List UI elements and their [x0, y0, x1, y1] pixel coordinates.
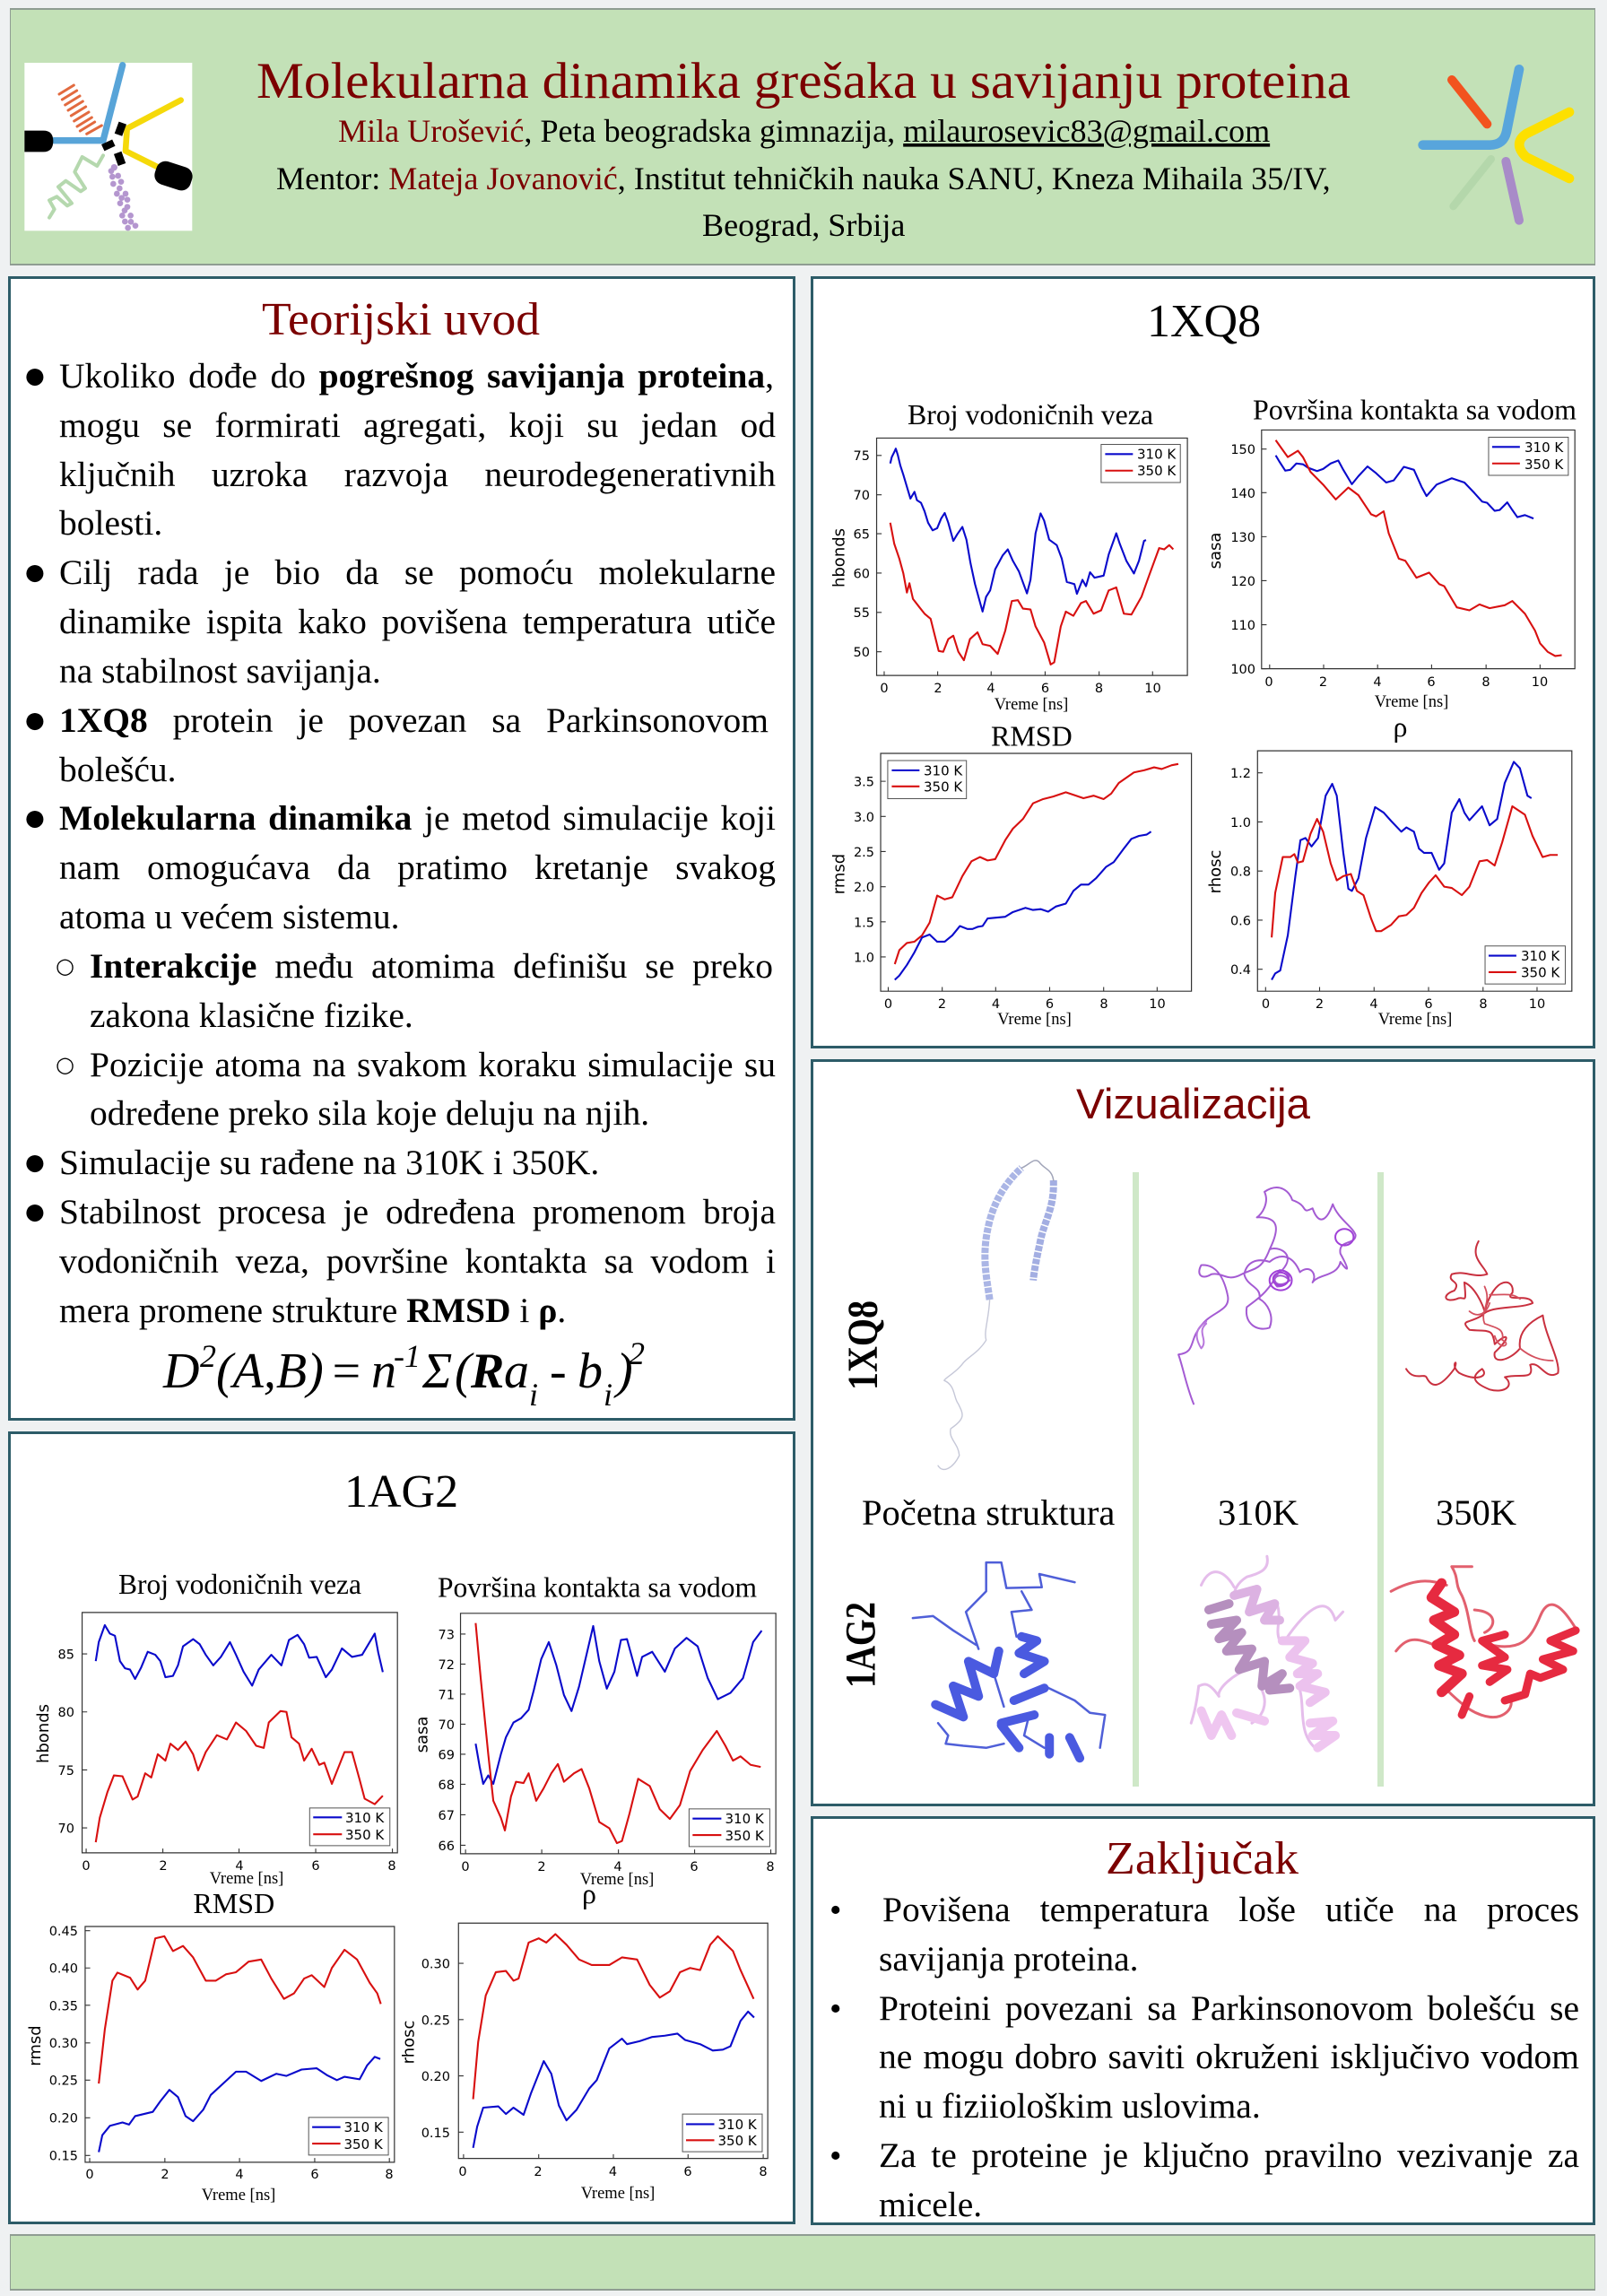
chart: 1XQ8 rmsd: 310 K: [924, 762, 963, 778]
chart: 1AG2 hbonds: Vreme [ns]: [210, 1870, 283, 1888]
panel: Teorijski uvod: ●: [25, 362, 45, 388]
chart: 1AG2 rmsd: 0: [85, 2168, 94, 2182]
protein: 1AG2 at 310K: [1191, 1556, 1343, 1750]
chart: 1AG2 rmsd: Vreme [ns]: [202, 2187, 275, 2205]
formula: 2: [629, 1335, 645, 1371]
text block: introduction bullets: Pozicije atoma na svakom koraku simulacije su: [90, 1045, 776, 1084]
chart: 1AG2 rhosc: 4: [609, 2165, 617, 2179]
heading: 1AG2: 1AG2: [344, 1466, 458, 1518]
chart: 1XQ8 sasa: 0: [1264, 675, 1273, 690]
chart: 1AG2 hbonds: 4: [235, 1859, 244, 1874]
chart: 1AG2 rmsd: 350 K: [344, 2136, 384, 2152]
chart: 1AG2 sasa: 69: [439, 1749, 455, 1763]
chart: 1AG2 hbonds: 70: [58, 1822, 74, 1837]
panel: Teorijski uvod: ●: [25, 1198, 45, 1224]
panel: Teorijski uvod: ●: [25, 804, 45, 831]
formula: -: [550, 1344, 567, 1399]
text block: introduction bullets: Interakcije među atomima definišu se preko: [90, 946, 773, 986]
location line: Beograd, Srbija: [702, 207, 905, 243]
chart: 1XQ8 rmsd: RMSD: [991, 719, 1073, 752]
formula: (A,B): [216, 1344, 324, 1399]
text block: conclusions: Proteini povezani sa Parkinsonovom bolešću se: [879, 1988, 1579, 2028]
chart: 1XQ8 rmsd: 2.5: [854, 846, 874, 860]
chart: 1XQ8 sasa: 8: [1481, 675, 1490, 690]
chart: 1XQ8 rmsd: Vreme [ns]: [997, 1011, 1072, 1029]
chart: 1AG2 rmsd: 0.30: [49, 2037, 78, 2051]
text block: introduction bullets: bolešću.: [59, 750, 177, 789]
formula: R: [470, 1344, 504, 1399]
text block: introduction bullets: atoma u većem sistemu.: [59, 897, 400, 936]
chart: 1AG2 sasa: Vreme [ns]: [580, 1871, 654, 1889]
chart: 1AG2 hbonds: 85: [58, 1648, 74, 1663]
chart: 1XQ8 sasa: Vreme [ns]: [1375, 693, 1448, 711]
protein: 1XQ8 at 350K: [1406, 1241, 1559, 1391]
chart: 1XQ8 hbonds: 10: [1144, 682, 1161, 696]
chart: 1XQ8 rmsd: 8: [1099, 997, 1108, 1012]
panel: 1AG2 charts: [8, 1431, 795, 2224]
chart: 1AG2 rmsd: RMSD: [194, 1887, 274, 1919]
chart: 1XQ8 hbonds: 8: [1095, 682, 1103, 696]
chart: 1AG2 hbonds: Broj vodoničnih veza: [118, 1568, 361, 1600]
chart: 1XQ8 rmsd: 0: [884, 997, 892, 1012]
panel: Zaključak: •: [830, 1990, 841, 2028]
mentor line: Mentor: Mateja Jovanović, Institut tehničkih nauka SANU, Kneza Mihaila 35/IV,: [276, 161, 1331, 196]
title: Molekularna dinamika grešaka u savijanju proteina: [256, 53, 1351, 109]
formula: Σ: [421, 1344, 452, 1399]
formula: ): [613, 1344, 633, 1399]
chart: 1XQ8 rhosc: 4: [1369, 997, 1378, 1012]
chart: 1AG2 rmsd: rmsd: [26, 2025, 45, 2066]
text block: introduction bullets: 1XQ8 protein je povezan sa Parkinsonovom: [59, 700, 769, 740]
chart: 1XQ8 rhosc: 1.0: [1230, 816, 1251, 831]
chart: 1XQ8 hbonds: hbonds: [830, 528, 848, 587]
chart: 1XQ8 sasa: 10: [1532, 675, 1548, 690]
text block: introduction bullets: ključnih uzroka razvoja neurodegenerativnih: [59, 455, 776, 494]
text block: introduction bullets: vodoničnih veza, površine kontakta sa vodom i: [59, 1241, 776, 1281]
chart: 1XQ8 hbonds: 4: [986, 682, 995, 696]
formula: (: [455, 1344, 474, 1399]
chart: 1AG2 rmsd: 0.45: [49, 1925, 78, 1939]
chart: 1XQ8 sasa: 130: [1230, 531, 1255, 545]
chart: 1XQ8 rmsd: 2.0: [854, 881, 874, 895]
chart: 1XQ8 hbonds: Vreme [ns]: [995, 696, 1068, 714]
text block: introduction bullets: dinamike ispita kako povišena temperatura utiče: [59, 602, 776, 641]
chart: 1XQ8 rhosc: 0.4: [1230, 963, 1251, 978]
formula: b: [578, 1344, 603, 1399]
protein: 1XQ8 initial structure: [938, 1161, 1054, 1469]
panel: Zaključak: •: [830, 2137, 841, 2175]
chart: 1XQ8 hbonds: 2: [934, 682, 942, 696]
chart: 1AG2 rmsd: 4: [235, 2168, 244, 2182]
text block: introduction bullets: zakona klasične fizike.: [90, 996, 413, 1035]
chart: 1AG2 sasa: [413, 1571, 776, 1889]
chart: 1XQ8 rhosc: rhosc: [1206, 850, 1225, 893]
formula: D: [162, 1344, 199, 1399]
chart: 1XQ8 hbonds: 50: [854, 646, 870, 660]
chart: 1XQ8 sasa: 110: [1230, 619, 1255, 633]
chart: 1AG2 hbonds: 310 K: [345, 1810, 385, 1826]
formula: i: [604, 1377, 612, 1413]
chart: 1AG2 sasa: 73: [439, 1629, 455, 1643]
text block: conclusions: Za te proteine je ključno pravilno vezivanje za: [879, 2135, 1579, 2175]
chart: 1AG2 rhosc: 0.25: [421, 2014, 450, 2029]
chart: 1XQ8 sasa: 2: [1319, 675, 1327, 690]
chart: 1XQ8 sasa: 350 K: [1524, 457, 1564, 473]
chart: 1XQ8 hbonds: [830, 398, 1187, 714]
text block: introduction bullets: Stabilnost procesa je određena promenom broja: [59, 1192, 776, 1231]
panel: Teorijski uvod: ●: [25, 707, 45, 733]
chart: 1XQ8 hbonds: 60: [854, 567, 870, 581]
protein: 1AG2 initial structure: [913, 1562, 1105, 1758]
chart: 1AG2 rhosc: 6: [683, 2165, 692, 2179]
chart: 1AG2 sasa: 70: [439, 1718, 455, 1733]
formula: a: [504, 1344, 529, 1399]
chart: 1AG2 rhosc: 0.30: [421, 1957, 450, 1971]
chart: 1XQ8 rhosc: [1206, 710, 1572, 1029]
chart: 1AG2 rhosc: [400, 1877, 768, 2203]
chart: 1AG2 rhosc: 2: [534, 2165, 543, 2179]
chart: 1AG2 rmsd: 2: [161, 2168, 169, 2182]
text block: conclusions: ni u fiziiološkim uslovima.: [879, 2086, 1261, 2126]
chart: 1XQ8 sasa: Površina kontakta sa vodom: [1253, 393, 1577, 425]
chart: 1AG2 rmsd: 8: [385, 2168, 394, 2182]
chart: 1XQ8 hbonds: 0: [880, 682, 889, 696]
formula: n: [371, 1344, 396, 1399]
footer band: [10, 2234, 1595, 2291]
chart: 1XQ8 rhosc: 1.2: [1230, 767, 1251, 781]
chart: 1AG2 sasa: 310 K: [725, 1811, 765, 1827]
panel: Zaključak: [811, 1816, 1595, 2225]
text block: conclusions: savijanja proteina.: [879, 1939, 1139, 1979]
chart: 1XQ8 sasa: 120: [1230, 575, 1255, 589]
chart: 1AG2 sasa: 67: [439, 1809, 455, 1823]
chart: 1AG2 rmsd: 0.35: [49, 2000, 78, 2014]
chart: 1AG2 rhosc: 310 K: [717, 2117, 758, 2133]
chart: 1XQ8 rhosc: 0.6: [1230, 915, 1251, 929]
chart: 1XQ8 rmsd: 1.5: [854, 917, 874, 931]
chart: 1AG2 sasa: 0: [461, 1860, 470, 1874]
column label: initial structure: Početna struktura: [862, 1492, 1115, 1533]
chart: 1XQ8 rhosc: ρ: [1394, 710, 1407, 743]
chart: 1AG2 rhosc: rhosc: [400, 2021, 418, 2064]
chart: 1AG2 hbonds: 0: [82, 1859, 91, 1874]
chart: 1AG2 sasa: 72: [439, 1658, 455, 1673]
chart: 1AG2 rhosc: 8: [759, 2165, 768, 2179]
chart: 1XQ8 sasa: 4: [1373, 675, 1382, 690]
chart: 1AG2 rmsd: 0.40: [49, 1962, 78, 1977]
chart: 1XQ8 rmsd: 3.0: [854, 811, 874, 825]
chart: 1XQ8 sasa: 100: [1230, 663, 1255, 677]
chart: 1XQ8 rmsd: 3.5: [854, 775, 874, 789]
protein: 1AG2 at 350K: [1391, 1567, 1576, 1718]
chart: 1XQ8 sasa: [1206, 393, 1577, 711]
text block: introduction bullets: Molekularna dinamika je metod simulacije koji: [59, 798, 776, 838]
heading: Teorijski uvod: Teorijski uvod: [262, 294, 540, 345]
chart: 1AG2 hbonds: 6: [311, 1859, 320, 1874]
heading: 1XQ8: 1XQ8: [1147, 296, 1261, 347]
chart: 1XQ8 rhosc: 310 K: [1521, 948, 1560, 964]
text block: conclusions: ne mogu dobro saviti okruženi isključivo vodom: [879, 2037, 1579, 2076]
chart: 1XQ8 hbonds: Broj vodoničnih veza: [908, 398, 1153, 430]
chart: 1XQ8 hbonds: 55: [854, 606, 870, 621]
chart: 1XQ8 rmsd: 350 K: [924, 778, 963, 795]
chart: 1XQ8 rhosc: 8: [1479, 997, 1488, 1012]
panel: Teorijski uvod: [8, 276, 795, 1421]
chart: 1AG2 hbonds: 75: [58, 1764, 74, 1779]
panel: Teorijski uvod: ●: [25, 1149, 45, 1175]
text block: introduction bullets: bolesti.: [59, 503, 162, 543]
chart: 1XQ8 hbonds: 65: [854, 527, 870, 542]
chart: 1AG2 hbonds: 8: [387, 1859, 396, 1874]
column label: 350K: 350K: [1436, 1492, 1516, 1533]
panel: Zaključak: •: [830, 1892, 841, 1929]
text block: introduction bullets: mera promene strukture RMSD i ρ.: [59, 1291, 566, 1330]
chart: 1XQ8 hbonds: 350 K: [1137, 463, 1177, 479]
chart: 1XQ8 sasa: 6: [1427, 675, 1436, 690]
formula: i: [529, 1377, 538, 1413]
chart: 1XQ8 sasa: 140: [1230, 487, 1255, 501]
chart: 1XQ8 sasa: sasa: [1206, 533, 1225, 569]
text block: introduction bullets: Simulacije su rađene na 310K i 350K.: [59, 1143, 599, 1182]
chart: 1AG2 rhosc: 0.15: [421, 2126, 450, 2141]
header band: [10, 8, 1595, 265]
chart: 1AG2 hbonds: 2: [159, 1859, 168, 1874]
chart: 1AG2 rhosc: Vreme [ns]: [581, 2185, 655, 2203]
chart: 1XQ8 rmsd: 6: [1046, 997, 1054, 1012]
text block: conclusions: [830, 1890, 1579, 2224]
formula: [162, 1335, 645, 1413]
chart: 1XQ8 rmsd: [830, 719, 1192, 1029]
protein: 1XQ8 at 310K: [1178, 1187, 1356, 1404]
text block: introduction bullets: nam omogućava da pratimo kretanje svakog: [59, 848, 776, 887]
formula: -1: [394, 1338, 421, 1374]
text block: introduction bullets: mogu se formirati agregati, koji su jedan od: [59, 405, 776, 445]
formula: =: [329, 1344, 363, 1399]
chart: 1XQ8 rhosc: 350 K: [1521, 965, 1560, 981]
chart: 1AG2 hbonds: 80: [58, 1706, 74, 1720]
chart: 1AG2 rmsd: 310 K: [344, 2119, 384, 2135]
panel: 1XQ8 charts: [811, 276, 1595, 1048]
chart: 1XQ8 rhosc: 0: [1262, 997, 1270, 1012]
chart: 1AG2 sasa: 2: [537, 1860, 546, 1874]
chart: 1AG2 hbonds: [34, 1568, 397, 1888]
chart: 1XQ8 rhosc: 2: [1316, 997, 1324, 1012]
chart: 1AG2 rmsd: 0.25: [49, 2074, 78, 2088]
chart: 1AG2 rmsd: 6: [310, 2168, 319, 2182]
chart: 1XQ8 hbonds: 75: [854, 449, 870, 464]
chart: 1AG2 rmsd: 0.20: [49, 2111, 78, 2126]
text block: introduction bullets: određene preko sila koje deluju na njih.: [90, 1093, 649, 1133]
chart: 1AG2 sasa: 4: [613, 1860, 622, 1874]
text block: introduction bullets: [25, 356, 776, 1330]
heading: Zaključak: Zaključak: [1106, 1833, 1299, 1884]
chart: 1AG2 sasa: 8: [766, 1860, 775, 1874]
chart: 1AG2 rmsd: 0.15: [49, 2149, 78, 2163]
text block: introduction bullets: ○: [56, 953, 74, 978]
row label: 1AG2: 1AG2: [838, 1602, 884, 1688]
icon: left logo: [24, 63, 195, 230]
chart: 1AG2 rhosc: 0: [458, 2165, 467, 2179]
text block: introduction bullets: Ukoliko dođe do pogrešnog savijanja proteina,: [59, 356, 774, 396]
text block: conclusions: micele.: [879, 2185, 982, 2224]
heading: Vizualizacija: Vizualizacija: [1076, 1080, 1311, 1127]
chart: 1AG2 sasa: 66: [439, 1839, 455, 1854]
icon: right logo: [1423, 69, 1569, 221]
chart: 1AG2 sasa: Površina kontakta sa vodom: [438, 1571, 757, 1604]
chart: 1AG2 rhosc: ρ: [582, 1877, 596, 1909]
chart: 1AG2 sasa: 71: [439, 1688, 455, 1702]
chart: 1AG2 sasa: 68: [439, 1779, 455, 1793]
chart: 1XQ8 rmsd: 1.0: [854, 951, 874, 965]
chart: 1AG2 sasa: 6: [690, 1860, 699, 1874]
panel: Vizualizacija: [811, 1059, 1595, 1806]
chart: 1XQ8 rhosc: 10: [1529, 997, 1545, 1012]
chart: 1XQ8 hbonds: 6: [1041, 682, 1049, 696]
chart: 1XQ8 rmsd: rmsd: [830, 854, 848, 894]
formula: 2: [200, 1338, 216, 1374]
chart: 1AG2 hbonds: hbonds: [34, 1704, 53, 1763]
chart: 1AG2 hbonds: 350 K: [345, 1827, 385, 1843]
chart: 1XQ8 hbonds: 70: [854, 489, 870, 503]
chart: 1AG2 rhosc: 350 K: [717, 2133, 758, 2149]
text block: introduction bullets: na stabilnost savijanja.: [59, 651, 381, 691]
chart: 1XQ8 sasa: 310 K: [1524, 439, 1564, 456]
chart: 1XQ8 sasa: 150: [1230, 443, 1255, 457]
chart: 1AG2 rmsd: [26, 1887, 395, 2205]
column label: 310K: 310K: [1218, 1492, 1299, 1533]
chart: 1AG2 sasa: 350 K: [725, 1828, 765, 1844]
text block: conclusions: Povišena temperatura loše utiče na proces: [882, 1890, 1579, 1929]
chart: 1AG2 sasa: sasa: [413, 1717, 432, 1752]
panel: Teorijski uvod: ●: [25, 559, 45, 585]
chart: 1XQ8 rmsd: 4: [992, 997, 1000, 1012]
chart: 1XQ8 rhosc: Vreme [ns]: [1378, 1011, 1452, 1029]
chart: 1XQ8 hbonds: 310 K: [1137, 447, 1177, 463]
chart: 1XQ8 rhosc: 0.8: [1230, 865, 1251, 879]
chart: 1XQ8 rhosc: 6: [1424, 997, 1433, 1012]
chart: 1XQ8 rmsd: 2: [938, 997, 946, 1012]
author line: Mila Urošević, Peta beogradska gimnazija, milaurosevic83@gmail.com: [338, 113, 1270, 149]
row label: 1XQ8: 1XQ8: [839, 1300, 887, 1390]
text block: introduction bullets: ○: [56, 1052, 74, 1077]
chart: 1XQ8 rmsd: 10: [1149, 997, 1166, 1012]
text block: introduction bullets: Cilj rada je bio da se pomoću molekularne: [59, 552, 776, 592]
chart: 1AG2 rhosc: 0.20: [421, 2070, 450, 2084]
